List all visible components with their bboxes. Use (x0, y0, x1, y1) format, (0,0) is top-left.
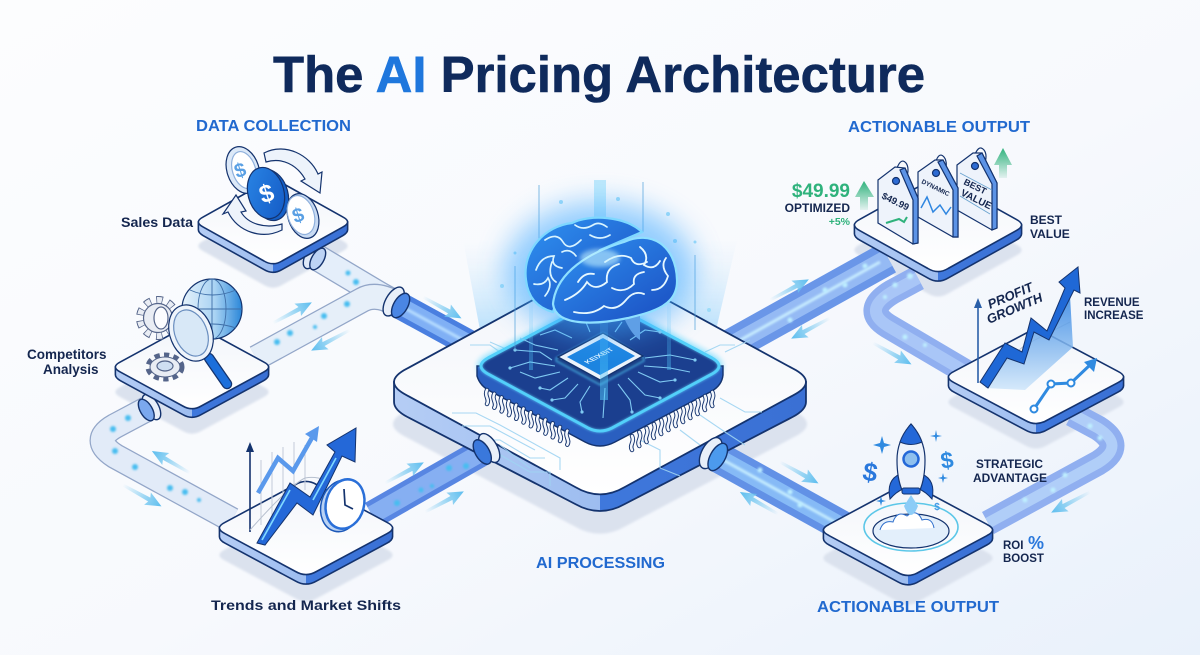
panel: revenue platform (948, 330, 1124, 433)
label: Revenue Increase: REVENUE (1084, 297, 1140, 309)
icon: three price tags: DYNAMIC (920, 179, 951, 198)
label: Revenue Increase: INCREASE (1084, 310, 1144, 322)
chip circuit traces (510, 320, 695, 418)
pipe: processor to rocket (716, 456, 842, 526)
heading: Actionable Output top: ACTIONABLE OUTPUT (848, 119, 1030, 136)
panel: AI processing platform (394, 270, 806, 511)
label: Strategic Advantage: ADVANTAGE (973, 473, 1047, 485)
icon: three price tags: $49.99 (880, 191, 911, 213)
callout: optimized price: OPTIMIZED (785, 201, 850, 215)
icon: coins and exchange arrows: $ (256, 179, 278, 210)
heading: Data Collection: DATA COLLECTION (196, 118, 351, 135)
icon: coins and exchange arrows: $ (232, 159, 249, 183)
chart: profit growth arrow: GROWTH (984, 290, 1045, 327)
label: Strategic Advantage (973, 459, 1047, 485)
label: ROI Boost (1003, 533, 1044, 565)
label: Strategic Advantage: STRATEGIC (976, 459, 1043, 471)
icon: rocket launch (860, 424, 958, 551)
icon: three price tags: BEST (962, 177, 989, 197)
pipe: competitors to trends loop (102, 409, 232, 520)
data particles (110, 264, 1102, 508)
pipe: processor to price tags (728, 258, 888, 347)
pipe: sales data to processor (318, 258, 472, 345)
processor chip: KEIXBIT (582, 346, 617, 365)
heading: AI Processing: AI PROCESSING (536, 555, 665, 572)
pipe: price tags to profit chart (876, 278, 966, 372)
chart: small trend line (1030, 358, 1097, 412)
label: Best Value: BEST (1030, 213, 1063, 227)
chart: profit growth arrow (974, 267, 1080, 390)
callout: optimized price (785, 181, 851, 228)
panel: Trends platform (219, 481, 393, 584)
central chip die (556, 333, 644, 385)
icon: trend chart with clock (246, 426, 370, 545)
icon: coins and exchange arrows: $ (290, 204, 307, 228)
callout: optimized price: +5% (829, 216, 851, 228)
pipe: competitors to processor (256, 297, 397, 358)
label: Sales Data: Sales Data (121, 215, 194, 230)
chart: profit growth arrow: PROFIT (985, 279, 1036, 312)
brain light pillars (500, 180, 711, 400)
panel: Competitors Analysis platform (115, 325, 269, 417)
label: ROI Boost: ROI (1003, 540, 1023, 552)
panel: rocket platform (823, 485, 993, 585)
central light beams (463, 240, 737, 330)
platform circuit traces (452, 340, 762, 486)
icon: rocket launch: $ (860, 456, 880, 488)
chip pins (486, 390, 713, 450)
label: Competitors Analysis: Analysis (43, 362, 99, 377)
pipe couplings (134, 240, 733, 475)
label: ROI Boost: BOOST (1003, 553, 1044, 565)
heading: Actionable Output bottom: ACTIONABLE OUTPUT (817, 599, 999, 616)
icon: three price tags: VALUE (959, 188, 994, 212)
icon: three price tags (878, 148, 997, 244)
panel: price tag platform (854, 178, 1022, 281)
icon: coins and exchange arrows (220, 142, 324, 243)
label: Competitors Analysis: Competitors (27, 347, 107, 362)
flow arrows (120, 273, 1093, 520)
panel: Sales Data platform (198, 180, 348, 272)
callout: optimized price: $49.99 (792, 181, 850, 202)
icon: glowing AI brain (505, 202, 695, 340)
icon: rocket launch: $ (939, 446, 955, 474)
platform shadows (115, 203, 1124, 605)
icon: rocket launch: $ (934, 502, 940, 513)
label: ROI Boost: % (1028, 533, 1044, 553)
title: The AI Pricing Architecture (273, 46, 925, 103)
processor chip (477, 302, 723, 450)
icon: green up arrows (855, 148, 1012, 210)
pipe: profit chart to rocket (988, 414, 1112, 523)
pipe: trends to processor (372, 451, 484, 515)
icon: gears, globe and magnifier (141, 279, 242, 384)
label: Trends and Market Shifts: Trends and Market Shifts (211, 597, 401, 613)
label: Best Value: VALUE (1030, 227, 1070, 241)
